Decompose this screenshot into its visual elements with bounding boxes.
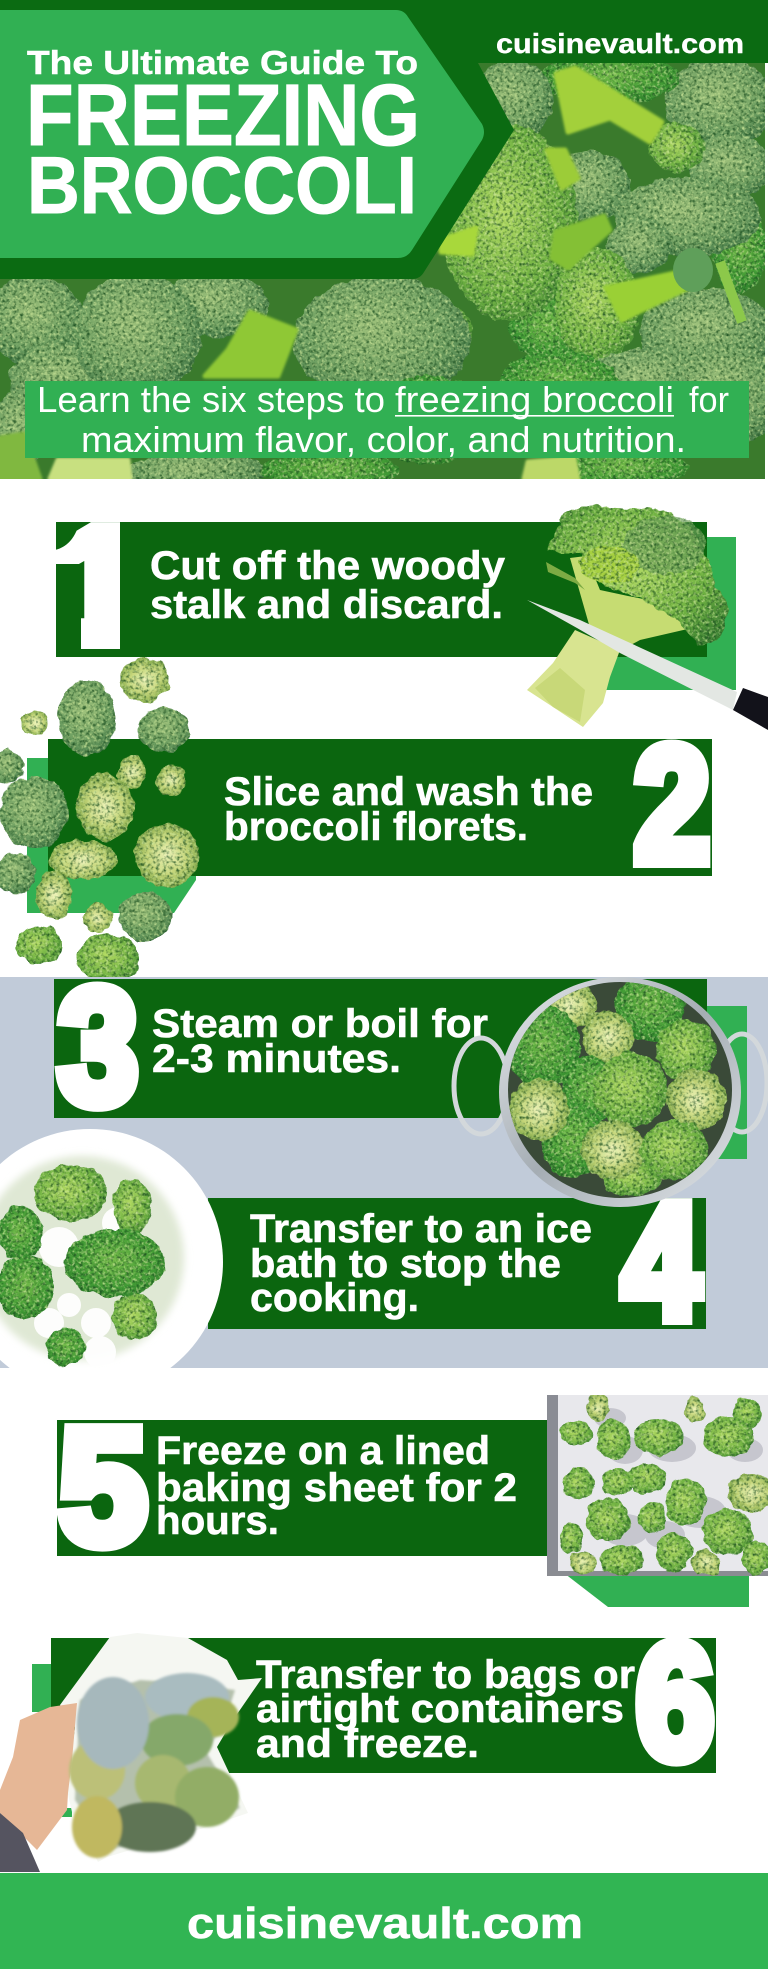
step 5 text: hours. — [156, 1499, 279, 1543]
footer band — [0, 1873, 768, 1969]
site name top: cuisinevault.com — [496, 28, 744, 59]
step 2 text: Slice and wash the — [224, 770, 593, 814]
subtitle panel: Learn the six steps to — [37, 379, 385, 420]
step 3 bar — [54, 979, 707, 1118]
icon: hand with freezer bag — [0, 1633, 262, 1872]
light green arrow panel — [0, 10, 484, 258]
title: The Ultimate Guide To — [27, 44, 418, 81]
step 6 text: Transfer to bags or — [256, 1653, 635, 1697]
step 5 bar — [57, 1420, 549, 1556]
step 1 text: Cut off the woody — [150, 544, 506, 588]
icon: baking sheet with florets — [547, 1394, 768, 1576]
step 2 number: 2 — [634, 713, 710, 896]
icon: pot of broccoli — [454, 973, 767, 1207]
step 3 number: 3 — [58, 955, 138, 1138]
icon: knife — [527, 600, 768, 730]
step 5 — [57, 1394, 768, 1607]
step 6 bar — [51, 1638, 716, 1773]
step 5 number: 5 — [59, 1395, 147, 1578]
step 2 — [0, 658, 712, 982]
icon: broccoli head with stalk — [527, 504, 730, 727]
step 5 text — [156, 1429, 517, 1543]
step 4 text: cooking. — [250, 1276, 419, 1320]
step 5 text: Freeze on a lined — [156, 1429, 490, 1473]
step 2 accent — [27, 758, 196, 913]
subtitle panel: for — [689, 379, 729, 420]
step 4 number: 4 — [622, 1170, 700, 1353]
step 4 bar — [208, 1198, 706, 1329]
title: FREEZING — [26, 67, 420, 164]
step 1 — [50, 494, 768, 730]
dark top band and arrow — [0, 0, 768, 279]
step 2 text — [224, 770, 593, 849]
icon: ice bath bowl — [0, 1129, 223, 1368]
step 4 text: Transfer to an ice — [250, 1207, 592, 1251]
title: BROCCOLI — [27, 141, 417, 231]
icon: scattered florets — [0, 658, 199, 982]
subtitle panel: freezing broccoli — [395, 379, 674, 420]
step 6 text: and freeze. — [256, 1722, 479, 1766]
step 4 — [0, 1129, 706, 1368]
step 5 text: baking sheet for 2 — [156, 1466, 517, 1510]
step 1 text: stalk and discard. — [150, 583, 503, 627]
header banner — [0, 0, 768, 279]
step 6 text: airtight containers — [256, 1687, 624, 1731]
step 3 text: Steam or boil for — [152, 1002, 488, 1046]
step 1 text — [150, 544, 506, 627]
step 3 accent — [680, 1006, 747, 1159]
footer site name: cuisinevault.com — [187, 1899, 583, 1948]
step 1 accent — [600, 537, 736, 690]
subtitle panel: maximum flavor, color, and nutrition. — [81, 419, 686, 460]
step 3 text — [152, 1002, 488, 1081]
step 6 text — [256, 1653, 635, 1766]
step 4 text: bath to stop the — [250, 1242, 561, 1286]
step 6 accent — [32, 1664, 72, 1817]
step 4 text — [250, 1207, 592, 1320]
gray band behind steps 3 and 4 — [0, 977, 768, 1368]
step 5 accent — [560, 1570, 749, 1607]
step 2 text: broccoli florets. — [224, 805, 528, 849]
step 1 bar — [56, 522, 707, 657]
step 3 text: 2-3 minutes. — [152, 1037, 401, 1081]
step 6 — [0, 1610, 716, 1872]
header photo: broccoli pile — [0, 52, 768, 492]
title — [26, 44, 420, 231]
subtitle panel — [25, 379, 749, 460]
step 1 number: 1 — [50, 494, 150, 677]
step 3 — [54, 955, 767, 1207]
step 2 bar — [48, 739, 712, 876]
step 6 number: 6 — [636, 1610, 714, 1793]
